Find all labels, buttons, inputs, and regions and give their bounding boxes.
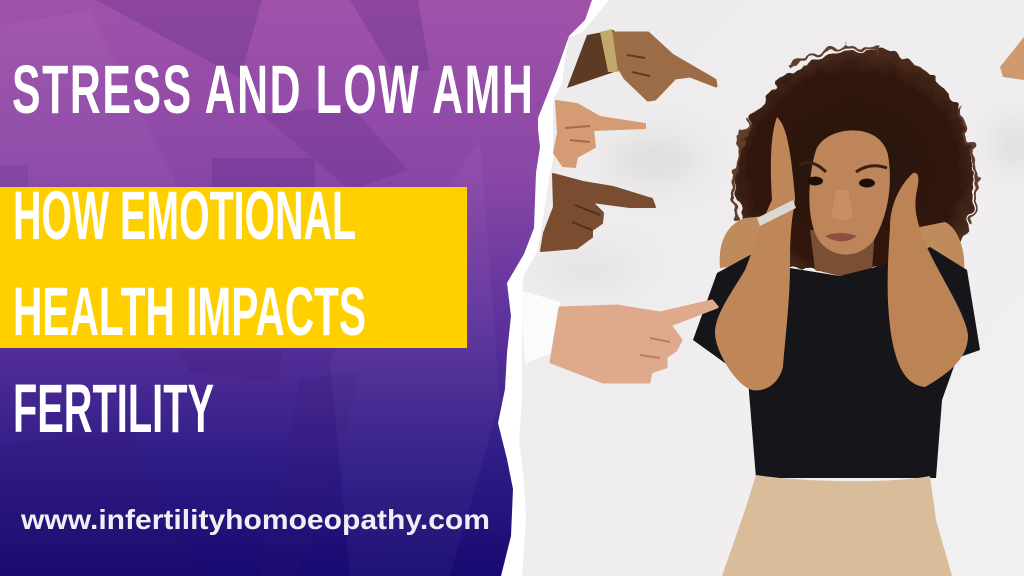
torn white paper edge (480, 0, 609, 576)
left arm (715, 117, 795, 390)
title: stress and low AMH: STRESS AND LOW AMH (12, 52, 533, 129)
right arm (888, 173, 968, 387)
bracelet (757, 200, 796, 226)
heading line: health impacts: HEALTH IMPACTS (13, 273, 366, 350)
icon: pointing hand right edge (1000, 37, 1024, 80)
website url: www.infertilityhomoeopathy.com (20, 504, 490, 535)
icon: pointing hand fourth with shirt cuff (520, 290, 717, 382)
yellow highlight banner (0, 187, 467, 348)
photo: woman covering her ears (693, 46, 980, 576)
neck (810, 230, 875, 276)
black top (693, 247, 980, 478)
face (809, 130, 890, 255)
hair fringe (790, 111, 908, 165)
beige skirt (722, 475, 952, 576)
hair back (733, 46, 977, 268)
icon: pointing hand third (541, 174, 655, 251)
shoulders (720, 216, 964, 272)
icon: pointing hand second (554, 101, 645, 167)
icon: pointing hand top (567, 29, 716, 100)
heading line: fertility: FERTILITY (13, 370, 214, 447)
panel: purple gradient background (0, 0, 600, 576)
photo panel: wall background (480, 0, 1024, 576)
heading line: how emotional: HOW EMOTIONAL (13, 177, 356, 254)
eyebrows, eyes, nose, mouth (799, 163, 887, 242)
faded background objects (0, 0, 430, 376)
photo: soft wall shadows (540, 119, 1024, 288)
